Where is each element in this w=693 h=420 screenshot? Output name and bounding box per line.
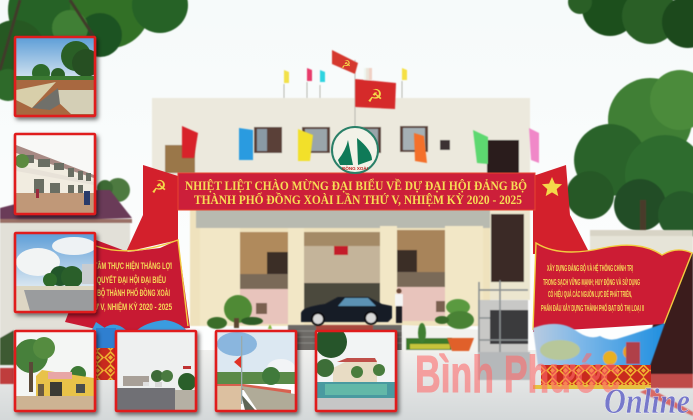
right pillar (533, 165, 590, 254)
poles (284, 60, 402, 170)
right side forecourt and grass (402, 325, 482, 352)
thumbnail: road and palm trees (15, 233, 96, 312)
left panel slogan (71, 260, 172, 312)
thumbnail: city street (116, 331, 196, 411)
columns (200, 226, 483, 326)
bonsai in orange pot right (418, 299, 474, 351)
wall (0, 223, 130, 350)
lower facade and pillars (190, 210, 490, 326)
rooftop flags (284, 50, 407, 170)
right panel slogan (541, 263, 644, 313)
left pillar (126, 165, 178, 252)
left low building with tiled roof (0, 190, 132, 384)
left panel slogan: QUYẾT TÂM THỰC HIỆN THẮNG LỢI (73, 260, 172, 271)
small trees behind left building (97, 178, 130, 202)
parked black car (301, 297, 392, 325)
thumbnail: school building (15, 134, 95, 214)
right base pattern (541, 365, 651, 385)
lobby banner emblem (334, 246, 348, 255)
right side tree (566, 70, 693, 239)
thumbnail: canal under blue sky (15, 37, 100, 116)
gate railing and rear car (478, 280, 530, 380)
line one: NHIỆT LIỆT CHÀO MỪNG ĐẠI BIỂU VỀ DỰ ĐẠI HỘI ĐẢNG BỘ (185, 178, 527, 193)
gold edge (96, 240, 188, 326)
thumbnail: yellow post office (14, 331, 95, 411)
bonsai left (207, 295, 272, 329)
right base gold edge (533, 385, 651, 389)
shrubs (0, 330, 14, 365)
upper facade (152, 98, 530, 210)
office building (152, 98, 530, 326)
top left tree (0, 0, 188, 101)
entrance steps (288, 325, 402, 353)
left panel blue crowd (96, 328, 116, 348)
top right tree (568, 0, 693, 48)
left red gate banner (65, 165, 190, 380)
thumbnail: swimming pool (315, 326, 396, 411)
left base pattern (96, 345, 116, 380)
line two: THÀNH PHỐ ĐỒNG XOÀI LẦN THỨ V, NHIỆM KỲ 2020 - 2025 (194, 192, 522, 207)
banner panel (178, 173, 535, 210)
left panel slogan: ĐẢNG BỘ THÀNH PHỐ ĐỒNG XOÀI (80, 287, 170, 298)
low red wall (0, 368, 14, 384)
right red gate banner (533, 165, 692, 389)
colored pennants (284, 70, 289, 83)
icon: hammer and sickle: ☭ (151, 177, 167, 197)
roof fascia (0, 219, 132, 223)
right facade bay (483, 210, 530, 300)
tiled roof (0, 190, 132, 222)
party flag large (355, 79, 396, 109)
left panel slogan: NGHỊ QUYẾT ĐẠI HỘI ĐẠI BIỂU (81, 274, 166, 285)
logo name: ĐỒNG XOÀI (342, 165, 368, 171)
entrance canopy (196, 208, 490, 228)
icon: hammer and sickle on large flag: ☭ (367, 86, 383, 106)
person in white shirt (395, 288, 403, 323)
gold edge (533, 243, 692, 330)
thumbnail: riverside with flag (216, 331, 296, 411)
facade flags (182, 126, 539, 164)
right panel illustration strip (533, 323, 665, 366)
right bay dark window (491, 214, 524, 282)
main red banner (178, 173, 535, 210)
ground pavement (0, 350, 693, 420)
upper floor windows (165, 126, 519, 174)
city emblem logo (332, 127, 378, 173)
lobby walls (240, 230, 446, 324)
right dark maroon wall (590, 230, 693, 416)
left panel blue base (92, 320, 188, 332)
icon: star (542, 177, 562, 196)
icon: hammer and sickle on small flag: ☭ (341, 59, 351, 71)
logo green leaves (338, 138, 372, 165)
left waving panel (65, 240, 190, 332)
left panel slogan: LẦN THỨ V, NHIỆM KỲ 2020 - 2025 (71, 301, 172, 312)
right waving panel (533, 243, 692, 332)
party flag small (332, 50, 358, 74)
